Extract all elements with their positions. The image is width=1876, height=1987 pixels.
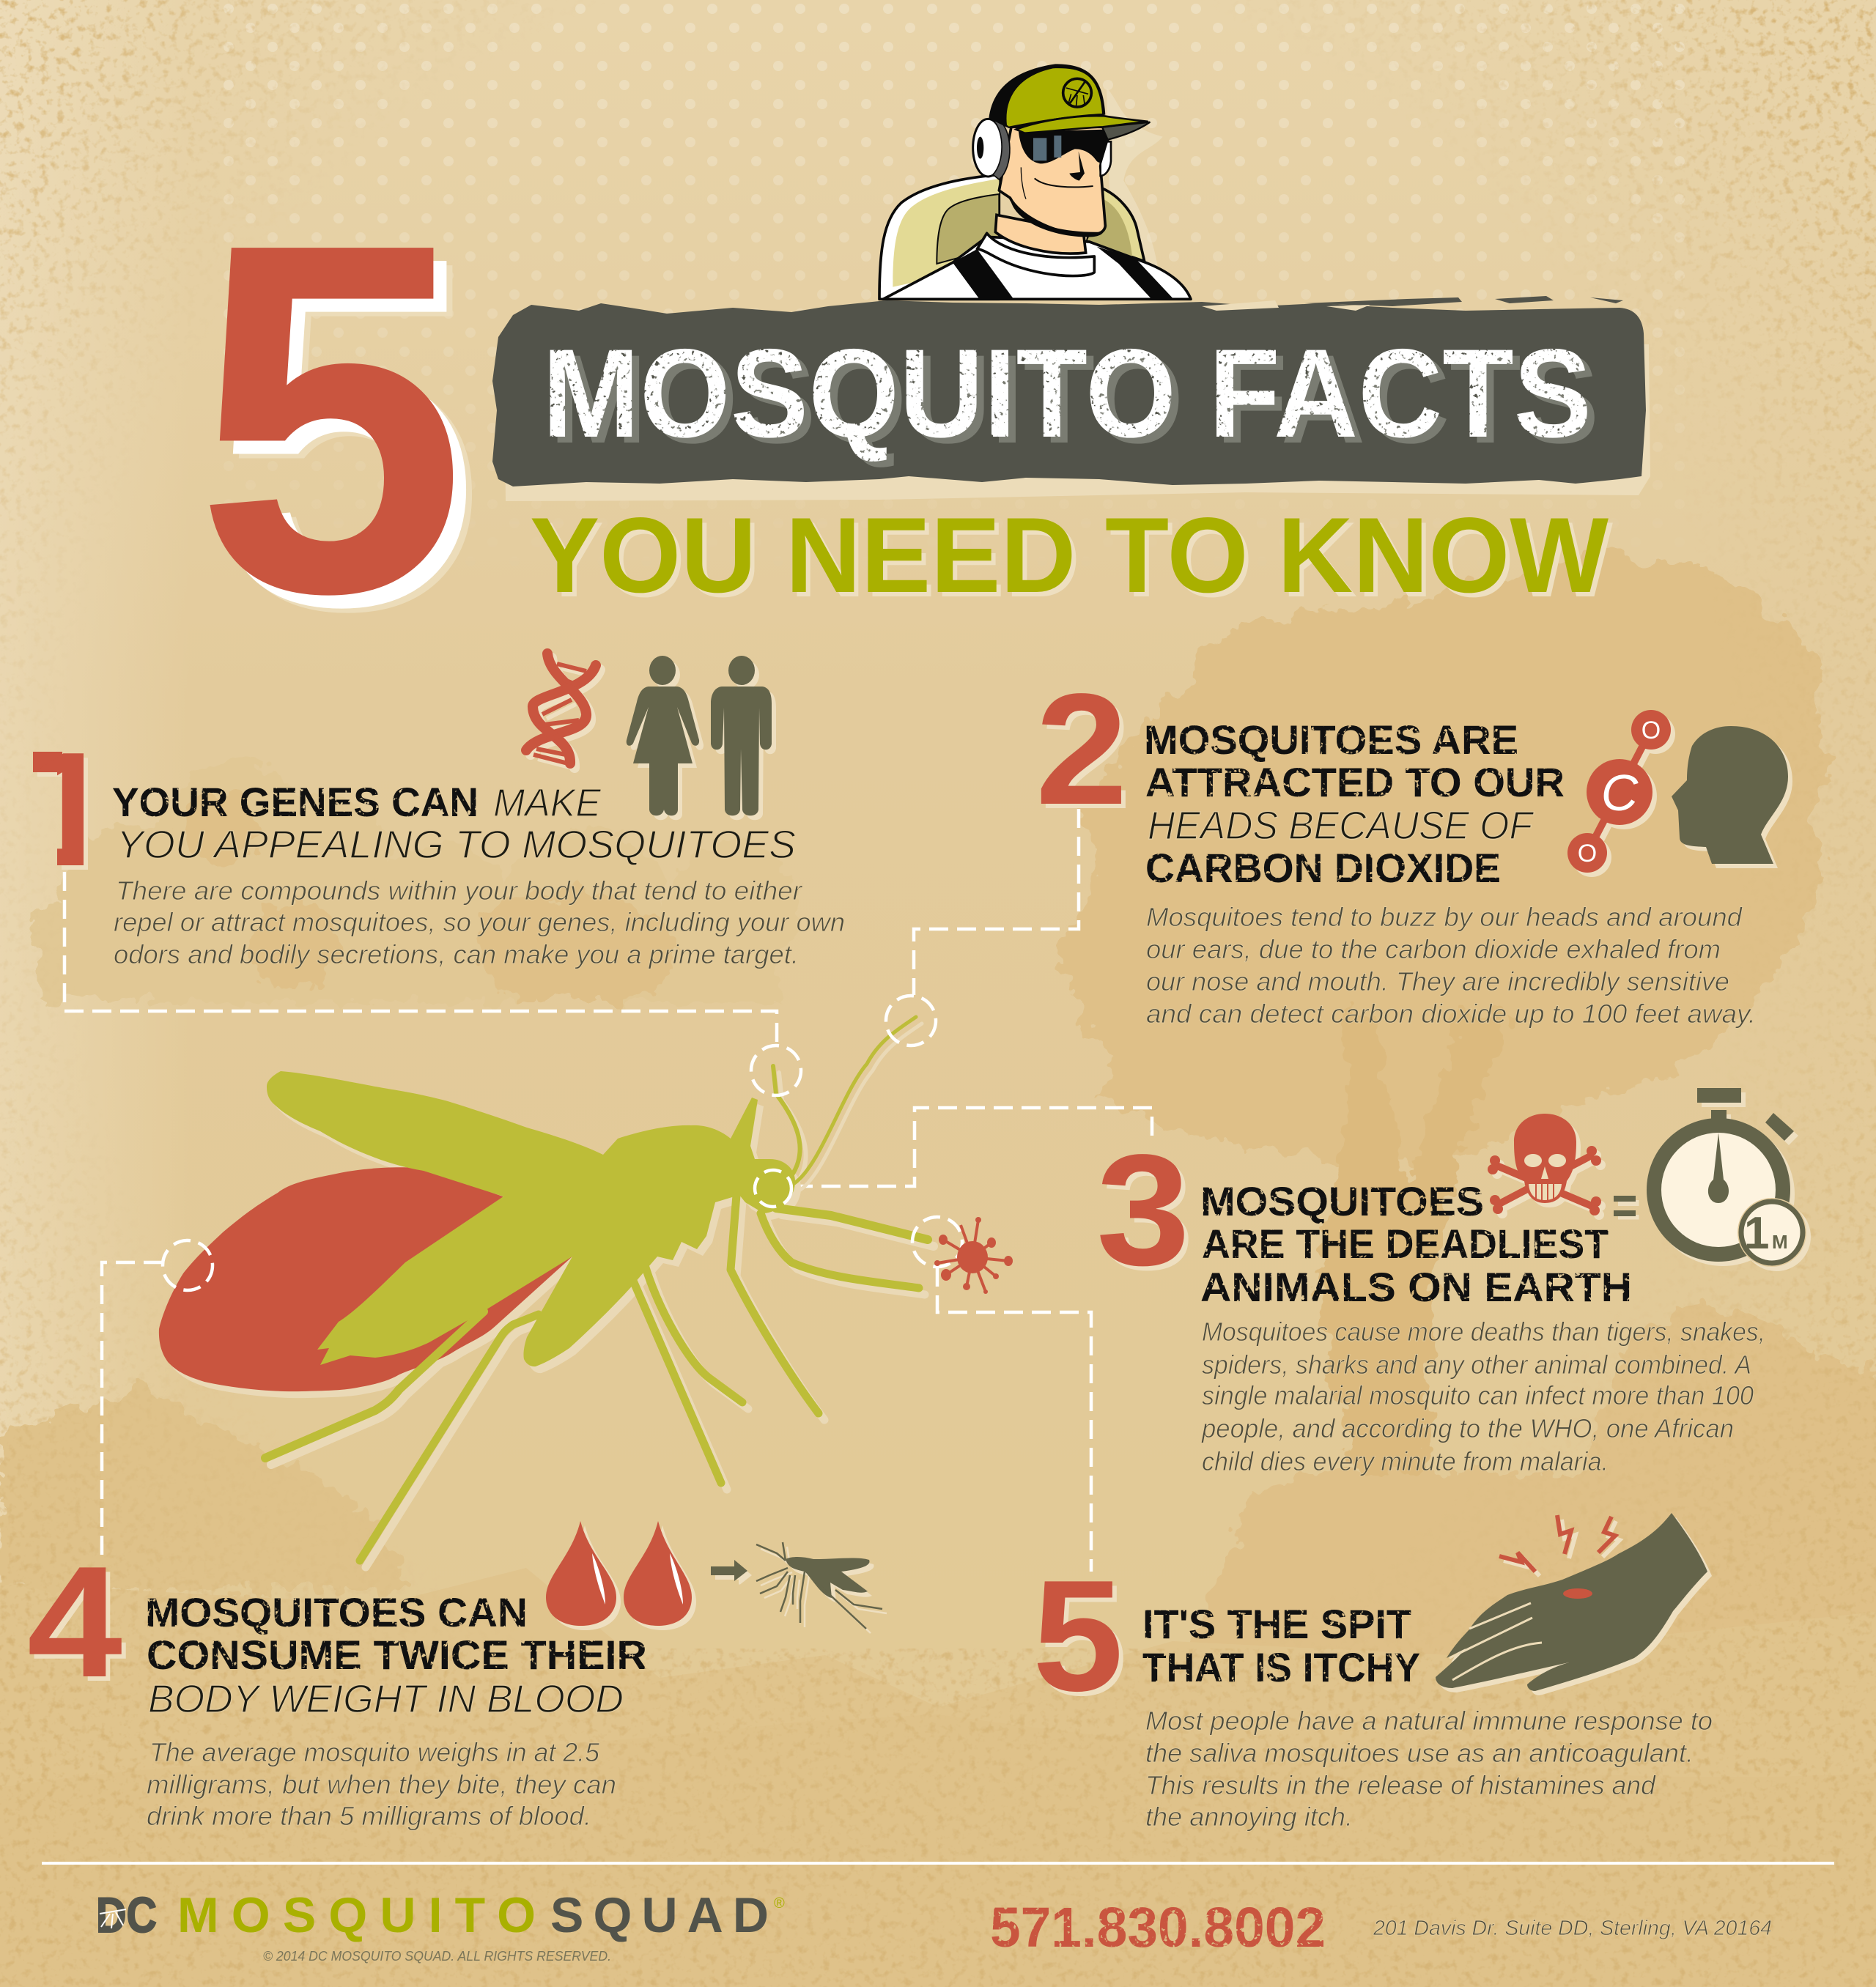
big number 5: 5 xyxy=(208,153,480,709)
footer logo xyxy=(96,1887,785,1943)
icon: red germ xyxy=(934,1217,1013,1294)
number 2: 2 xyxy=(1035,660,1128,837)
mosquito illustration xyxy=(159,1017,928,1561)
logo word mosquito: MOSQUITO xyxy=(177,1887,536,1943)
connector dashed lines xyxy=(64,809,1152,1572)
heading: ATTRACTED TO OUR xyxy=(1145,759,1565,805)
big number 5: 5 xyxy=(214,158,486,714)
number 3: 3 xyxy=(1096,1121,1190,1298)
icon: carbon dioxide molecule: O xyxy=(1642,717,1661,744)
heading: CARBON DIOXIDE xyxy=(1145,845,1501,891)
number 5: 5 xyxy=(1033,1547,1123,1724)
heading: IT'S THE SPIT xyxy=(1142,1601,1411,1647)
body text: Mosquitoes tend to buzz by our heads and around xyxy=(1146,902,1743,932)
icon: woman and man xyxy=(627,656,772,815)
title banner xyxy=(492,296,1650,501)
dashed target circles xyxy=(163,996,962,1290)
big number 5: 5 xyxy=(195,140,467,696)
mascot: pilot with cap, headset and sunglasses xyxy=(879,64,1191,299)
number 1: 1 xyxy=(24,719,114,900)
body text xyxy=(114,876,845,969)
title: mosquito facts: MOSQUITO FACTS xyxy=(550,329,1599,470)
body text xyxy=(1201,1317,1765,1476)
subtitle: you need to know: YOU NEED TO KNOW xyxy=(530,495,1609,615)
mosquito body and wings xyxy=(267,1071,795,1366)
number 4: 4 xyxy=(27,1533,122,1710)
copyright: © 2014 DC MOSQUITO SQUAD. ALL RIGHTS RESERVED. xyxy=(263,1949,611,1964)
icon: stopwatch one minute: 1 xyxy=(1744,1208,1769,1259)
icon: carbon dioxide molecule xyxy=(1567,710,1671,873)
heading xyxy=(1200,1178,1632,1310)
heading: CONSUME TWICE THEIR xyxy=(147,1632,647,1678)
icon: head silhouette xyxy=(1672,726,1788,864)
abdomen full of blood xyxy=(159,1167,572,1391)
icon: stopwatch one minute xyxy=(1647,1088,1803,1264)
body text xyxy=(1146,902,1756,1029)
icon: carbon dioxide molecule: C xyxy=(1601,764,1639,821)
heading: YOU APPEALING TO MOSQUITOES xyxy=(117,823,796,867)
heading xyxy=(112,779,796,867)
heading: THAT IS ITCHY xyxy=(1142,1644,1420,1690)
body text: repel or attract mosquitoes, so your genes, including your own xyxy=(114,907,845,937)
phone number: 571.830.8002 xyxy=(990,1896,1326,1959)
heading: MOSQUITOES CAN xyxy=(145,1589,528,1635)
fact 4 xyxy=(27,1521,882,1831)
heading: MOSQUITOES ARE xyxy=(1144,717,1518,763)
body text: single malarial mosquito can infect more than 100 xyxy=(1202,1380,1754,1410)
body text: our ears, due to the carbon dioxide exhaled from xyxy=(1146,934,1721,964)
logo mark DC: DC xyxy=(96,1887,157,1943)
mosquito legs and antennae xyxy=(265,1017,928,1561)
body text: odors and bodily secretions, can make you a prime target. xyxy=(114,939,799,969)
heading: ARE THE DEADLIEST xyxy=(1202,1221,1609,1267)
body text xyxy=(147,1737,616,1831)
body text: milligrams, but when they bite, they can xyxy=(147,1769,616,1799)
footer divider xyxy=(42,1862,1834,1865)
icon: stopwatch one minute: M xyxy=(1772,1231,1788,1253)
heading xyxy=(1142,1601,1420,1690)
body text: Most people have a natural immune response to xyxy=(1145,1706,1713,1736)
body text: our nose and mouth. They are incredibly sensitive xyxy=(1146,966,1729,996)
number 1 xyxy=(33,752,88,870)
body text: This results in the release of histamines and xyxy=(1145,1770,1656,1800)
body text: drink more than 5 milligrams of blood. xyxy=(147,1801,591,1831)
heading: HEADS BECAUSE OF xyxy=(1148,804,1535,848)
heading: MAKE xyxy=(493,781,602,825)
address: 201 Davis Dr. Suite DD, Sterling, VA 20164 xyxy=(1373,1917,1772,1940)
icon: skull and crossbones xyxy=(1488,1114,1601,1215)
body text: people, and according to the WHO, one African xyxy=(1201,1413,1734,1443)
logo word squad: SQUAD xyxy=(550,1887,769,1943)
icon: carbon dioxide molecule: O xyxy=(1578,840,1597,867)
body text: The average mosquito weighs in at 2.5 xyxy=(149,1737,600,1767)
heading xyxy=(1144,717,1565,891)
heading: YOUR GENES CAN xyxy=(112,779,479,825)
heading: ANIMALS ON EARTH xyxy=(1200,1264,1632,1310)
body text: and can detect carbon dioxide up to 100 feet away. xyxy=(1146,999,1756,1029)
body text: spiders, sharks and any other animal combined. A xyxy=(1202,1350,1751,1380)
fact 3 xyxy=(1096,1088,1803,1476)
body text: Mosquitoes cause more deaths than tigers, snakes, xyxy=(1202,1317,1765,1347)
registered mark: ® xyxy=(774,1895,785,1912)
body text: the saliva mosquitoes use as an anticoagulant. xyxy=(1145,1738,1694,1768)
heading xyxy=(145,1589,647,1721)
icon: arrow xyxy=(711,1560,747,1581)
body text: child dies every minute from malaria. xyxy=(1202,1446,1609,1476)
fact 1 xyxy=(24,654,845,969)
heading: BODY WEIGHT IN BLOOD xyxy=(148,1677,624,1721)
body text xyxy=(1145,1706,1713,1832)
icon: small mosquito xyxy=(756,1542,882,1629)
icon: pain sparks xyxy=(1499,1515,1615,1572)
heading: MOSQUITOES xyxy=(1200,1178,1484,1224)
equals sign xyxy=(1614,1196,1636,1216)
icon: dna helix xyxy=(526,654,596,763)
fact 2 xyxy=(1035,660,1788,1029)
body text: the annoying itch. xyxy=(1145,1802,1353,1832)
icon: blood drops xyxy=(546,1521,692,1626)
fact 5 xyxy=(1033,1513,1713,1832)
body text: There are compounds within your body that tend to either xyxy=(116,876,803,906)
title: mosquito facts: MOSQUITO FACTS xyxy=(542,323,1592,464)
icon: hand with bite xyxy=(1436,1513,1707,1691)
